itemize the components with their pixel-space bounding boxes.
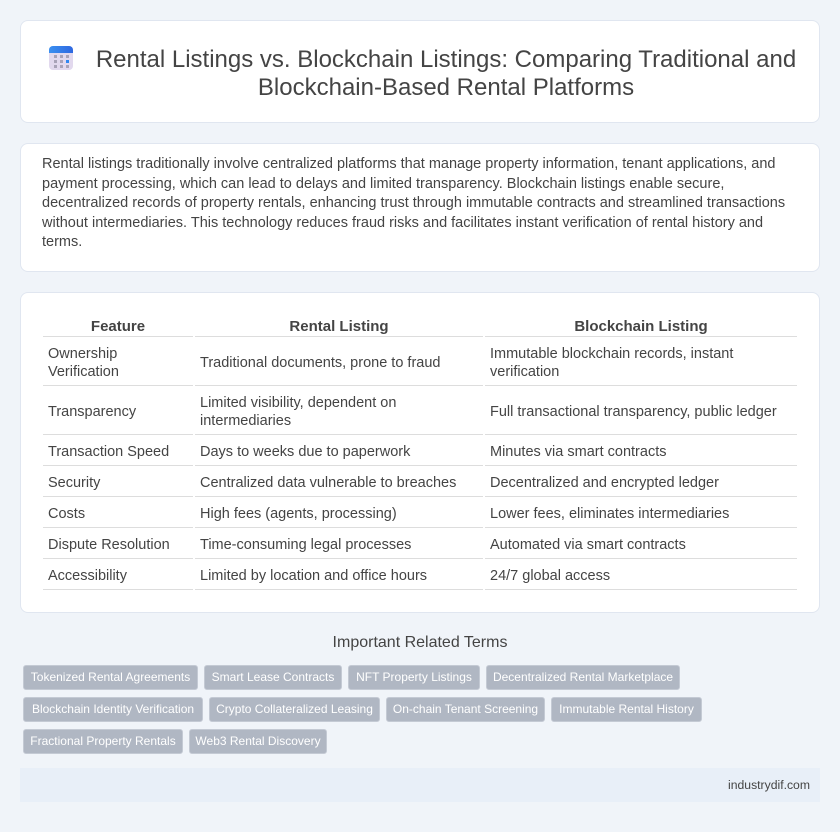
comparison table: Lower fees, eliminates intermediaries [490, 506, 729, 522]
comparison table: Full transactional transparency, public ledger [490, 404, 777, 420]
tag: Decentralized Rental Marketplace [493, 670, 673, 684]
comparison table: 24/7 global access [490, 568, 610, 584]
comparison table: Time-consuming legal processes [200, 537, 411, 553]
tag: Immutable Rental History [559, 702, 694, 716]
comparison table: Immutable blockchain records, instant verification [490, 346, 733, 380]
tag [204, 665, 342, 690]
intro paragraph: payment processing, which can lead to delays and limited transparency. Blockchain listings enable secure, [42, 176, 724, 192]
tag [386, 697, 545, 722]
comparison table: Centralized data vulnerable to breaches [200, 475, 456, 491]
tag [23, 729, 183, 754]
tag: Blockchain Identity Verification [32, 702, 194, 716]
comparison table: Feature [91, 318, 145, 335]
comparison table: Accessibility [48, 568, 127, 584]
intro paragraph [42, 156, 785, 250]
icon: calendar [49, 46, 73, 70]
comparison table: Transaction Speed [48, 444, 169, 460]
tag: Web3 Rental Discovery [195, 734, 321, 748]
tag: Smart Lease Contracts [212, 670, 334, 684]
intro text panel [20, 143, 820, 272]
related terms heading: Important Related Terms [333, 634, 507, 651]
comparison table: Minutes via smart contracts [490, 444, 666, 460]
tag [189, 729, 327, 754]
tag [209, 697, 380, 722]
title: Rental Listings vs. Blockchain Listings: Comparing Traditional and Blockchain-Based Rental Platforms [96, 46, 796, 101]
intro paragraph: Rental listings traditionally involve centralized platforms that manage property information, tenant applications, and [42, 156, 775, 172]
intro paragraph: without intermediaries. This technology reduces fraud risks and facilitates instant verification of rental history and [42, 214, 763, 230]
comparison table: Blockchain Listing [574, 318, 708, 335]
comparison table: Verification [48, 364, 119, 380]
comparison table: Days to weeks due to paperwork [200, 444, 410, 460]
comparison table: Automated via smart contracts [490, 537, 686, 553]
comparison table: Rental Listing [289, 318, 389, 335]
comparison table: Ownership [48, 346, 117, 362]
comparison table: Security [48, 475, 100, 491]
tag [348, 665, 480, 690]
tag: NFT Property Listings [356, 670, 472, 684]
tag: On-chain Tenant Screening [393, 702, 538, 716]
comparison table: Transparency [48, 404, 136, 420]
tag [23, 665, 198, 690]
comparison table [43, 318, 797, 590]
comparison table panel [20, 292, 820, 613]
tag [551, 697, 702, 722]
comparison table: High fees (agents, processing) [200, 506, 397, 522]
tag [23, 697, 203, 722]
footer bar [20, 768, 820, 802]
comparison table: Dispute Resolution [48, 537, 170, 553]
intro paragraph: terms. [42, 234, 82, 250]
header card [20, 20, 820, 123]
intro paragraph: decentralized records of property rentals, enhancing trust through immutable contracts and streamlined transactions [42, 195, 785, 211]
comparison table: Decentralized and encrypted ledger [490, 475, 719, 491]
tag: Fractional Property Rentals [30, 734, 176, 748]
tag [486, 665, 680, 690]
footer source: industrydif.com [728, 778, 810, 792]
comparison table: Limited visibility, dependent on intermediaries [200, 395, 396, 429]
comparison table: Limited by location and office hours [200, 568, 427, 584]
comparison table: Costs [48, 506, 85, 522]
comparison table: Traditional documents, prone to fraud [200, 355, 440, 371]
tag: Crypto Collateralized Leasing [216, 702, 373, 716]
tag: Tokenized Rental Agreements [31, 670, 190, 684]
